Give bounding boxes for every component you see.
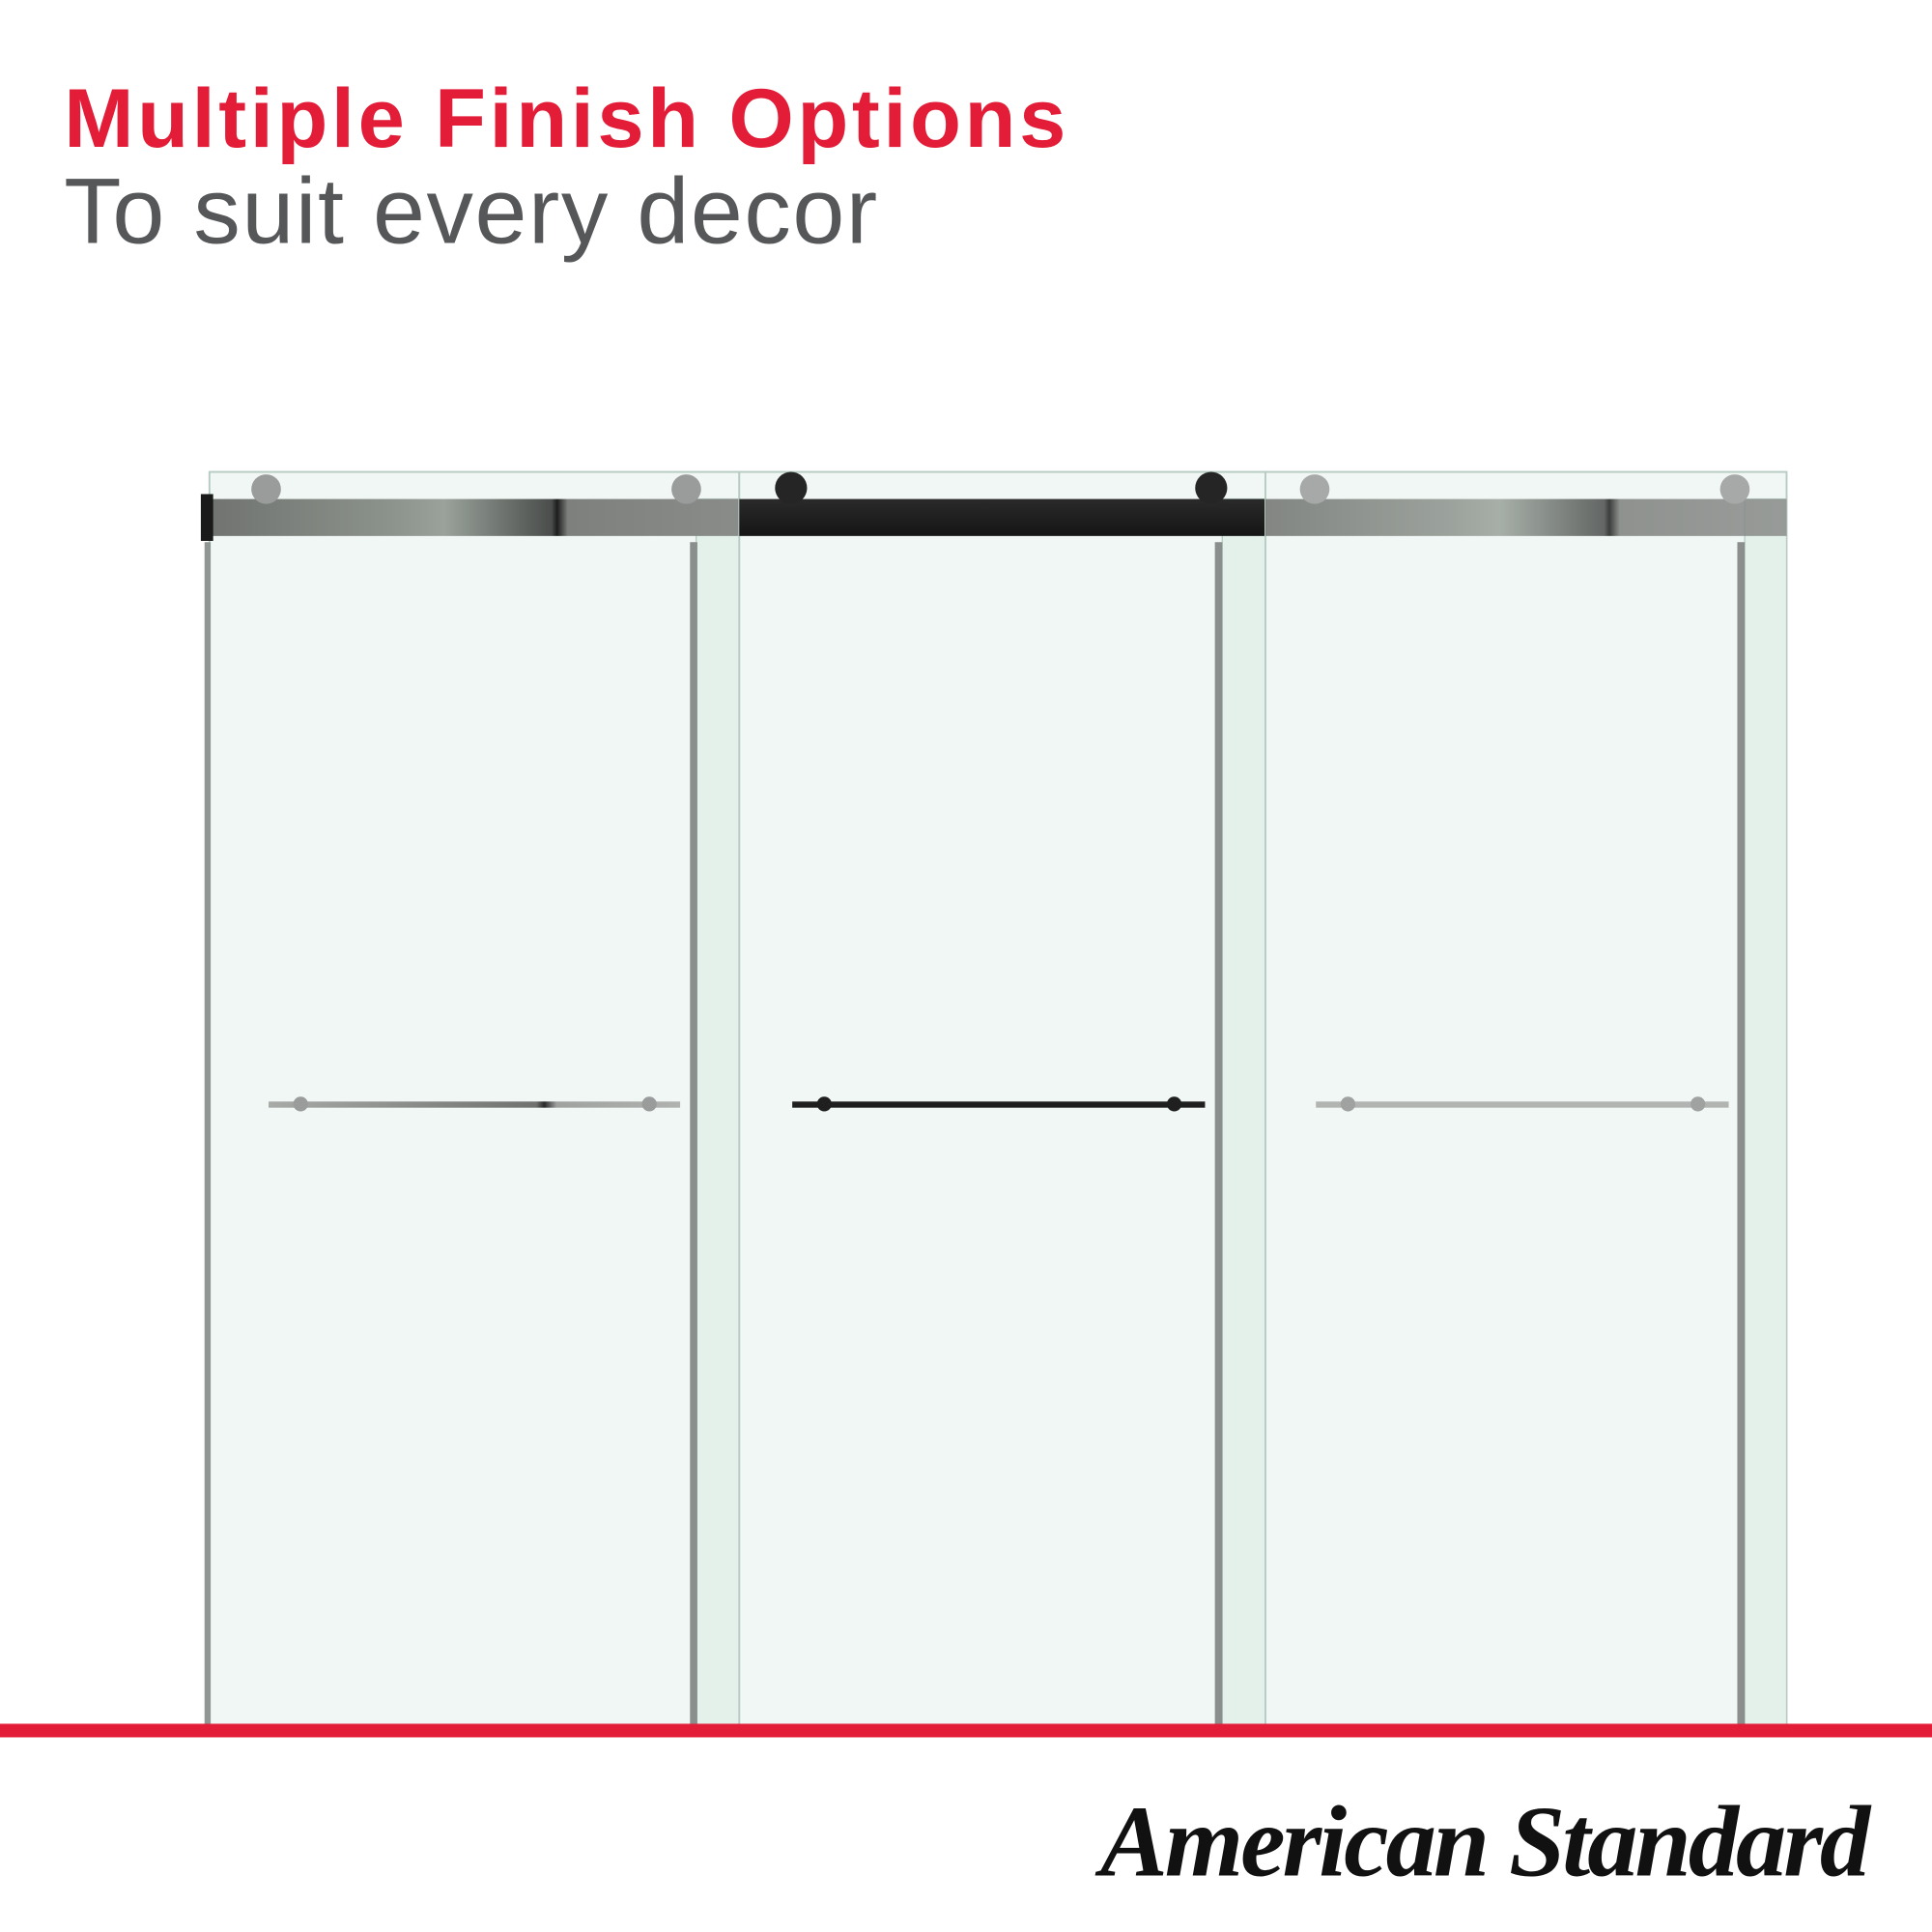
handle: nickel [1316, 1096, 1729, 1112]
handle: black [792, 1096, 1205, 1112]
subtitle: To suit every decor [64, 157, 877, 263]
red baseline [0, 1723, 1932, 1737]
title: Multiple Finish Options [64, 71, 1065, 165]
handle: stainless [269, 1096, 680, 1112]
panel: stainless door [201, 472, 739, 1725]
logo: American Standard [1094, 1785, 1872, 1897]
panel: matte black door [739, 472, 1265, 1725]
panel: brushed nickel door [1265, 472, 1786, 1725]
